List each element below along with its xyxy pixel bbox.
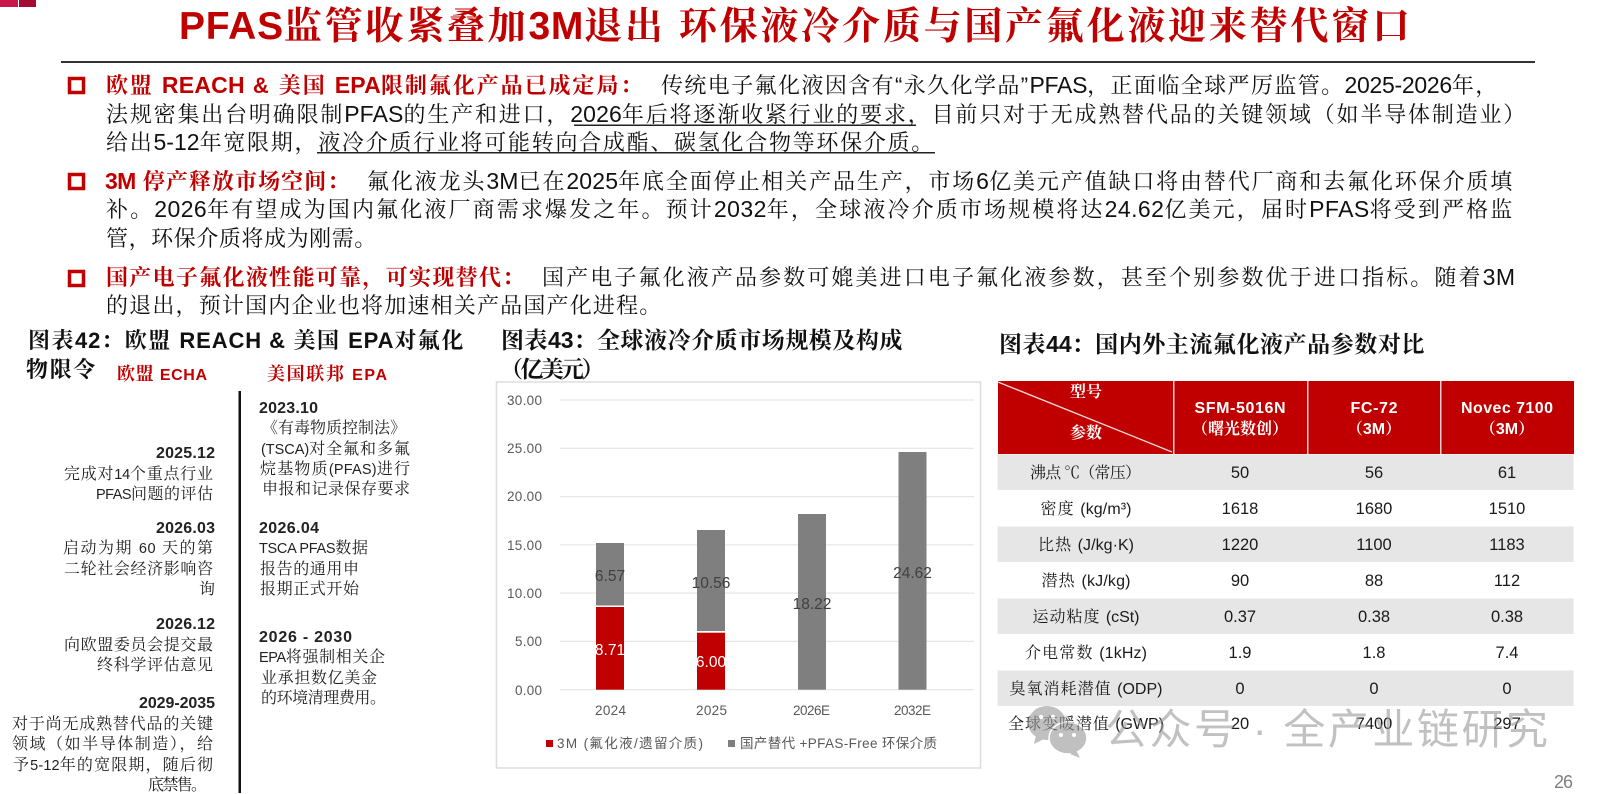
row: density	[1040, 500, 1525, 518]
EU events: 询	[199, 580, 216, 598]
table header: （3M）	[1480, 420, 1534, 438]
row: specific heat: 1100	[1356, 536, 1392, 554]
row: boiling point: 50	[1231, 464, 1249, 482]
row: specific heat	[1038, 536, 1525, 554]
bar: 2032E: 24.62	[893, 565, 932, 582]
point 2: 3M exit: 管，环保介质将成为刚需。	[106, 226, 378, 252]
EU events: 终科学评估意见	[97, 656, 214, 674]
row: dielectric constant	[1025, 644, 1518, 662]
EU events: 2029-2035	[139, 695, 215, 712]
row: ODP: 0	[1502, 680, 1512, 698]
US events: 报期正式开始	[260, 579, 360, 598]
point 3: domestic substitution: 国产电子氟化液性能可靠，可实现替代：	[106, 265, 526, 291]
panel: figure 44 table	[998, 331, 1574, 733]
y axis labels: 0.00	[515, 683, 542, 698]
bar: 2025	[692, 530, 730, 690]
table header: FC-72	[1350, 400, 1398, 417]
EU events: 对于尚无成熟替代品的关键	[12, 715, 214, 733]
row: latent heat: 112	[1494, 572, 1520, 590]
point 2: 3M exit: 3M 停产释放市场空间：	[105, 168, 351, 194]
row: specific heat: 1220	[1222, 536, 1258, 554]
row: density: 1510	[1489, 500, 1525, 518]
bar: 2025: 10.56	[692, 575, 730, 592]
row: latent heat: 88	[1365, 572, 1383, 590]
US events: 申报和记录保存要求	[262, 479, 411, 498]
x axis labels: 2025	[696, 703, 727, 718]
panel: figure 42 timeline	[12, 328, 464, 794]
row: viscosity	[1032, 608, 1523, 626]
row: dielectric constant: 1.8	[1363, 644, 1385, 662]
timeline axis	[238, 391, 241, 793]
row: density: 1618	[1222, 500, 1258, 518]
column label: EU ECHA: 欧盟 ECHA	[117, 364, 207, 384]
row: latent heat	[1042, 572, 1520, 590]
point 2: 3M exit	[70, 168, 1514, 252]
bar: 2024: 6.57	[595, 568, 625, 585]
row: viscosity: 0.38	[1358, 608, 1390, 626]
row: dielectric constant: 介电常数 (1kHz)	[1025, 644, 1147, 662]
row: ODP: 臭氧消耗潜值 (ODP)	[1010, 680, 1162, 698]
US events: TSCA PFAS数据	[259, 539, 369, 557]
EU events: 向欧盟委员会提交最	[64, 635, 214, 654]
table header	[998, 381, 1574, 454]
row: dielectric constant: 7.4	[1496, 644, 1518, 662]
x axis labels: 2032E	[894, 703, 931, 718]
row shading	[998, 454, 1574, 706]
y axis labels: 5.00	[515, 634, 542, 649]
row: boiling point: 56	[1365, 464, 1383, 482]
point 1: EU and US regulation: 传统电子氟化液因含有“永久化学品”PFAS，正面临全球严厉监管。2025-2026年，	[661, 72, 1499, 99]
panel: figure 43 chart	[496, 327, 980, 768]
heading: figure 43: （亿美元）	[500, 356, 605, 382]
point 1: EU and US regulation: 给出5-12年宽限期，液冷介质行业将可能转向合成酯、碳氢化合物等环保介质。	[106, 129, 935, 156]
EU events: 完成对14个重点行业	[64, 465, 214, 483]
EU events: PFAS问题的评估	[96, 485, 214, 503]
row: GWP	[1008, 715, 1521, 733]
row: viscosity: 0.38	[1491, 608, 1523, 626]
US events: 2023.10	[259, 400, 318, 417]
bar: 2024	[595, 543, 625, 690]
row: GWP: 20	[1231, 715, 1249, 733]
EU events: 领域（如半导体制造），给	[12, 735, 214, 753]
US events: 的环境清理费用。	[261, 689, 387, 707]
watermark: 公众号 · 全产业链研究	[1105, 706, 1548, 753]
EU events: 二轮社会经济影响咨	[64, 560, 214, 578]
heading: figure 42	[26, 328, 464, 382]
EU events: 予5-12年的宽限期，随后彻	[13, 755, 214, 774]
y axis labels: 20.00	[507, 489, 542, 504]
y axis labels	[507, 393, 542, 698]
icon: chat bubbles	[1028, 706, 1087, 758]
row: viscosity: 运动粘度 (cSt)	[1032, 608, 1140, 626]
table header: SFM-5016N	[1194, 400, 1286, 417]
x axis labels: 2024	[595, 703, 626, 718]
row: specific heat: 1183	[1489, 536, 1525, 554]
bar: 2026E: 18.22	[793, 596, 831, 613]
US events: 2026 - 2030	[259, 629, 352, 646]
US events: 报告的通用申	[260, 559, 360, 578]
title: PFAS监管收紧叠加3M退出 环保液冷介质与国产氟化液迎来替代窗口	[179, 5, 1412, 48]
row: GWP: 全球变暖潜值 (GWP)	[1008, 715, 1164, 733]
heading: figure 43	[500, 327, 903, 382]
legend	[546, 736, 937, 751]
table header: 型号	[1070, 383, 1102, 401]
US events: 烷基物质(PFAS)进行	[260, 460, 411, 478]
legend: 国产替代 +PFAS-Free 环保介质	[740, 736, 937, 751]
panel: key points	[70, 72, 1527, 319]
y axis labels: 15.00	[507, 538, 542, 553]
row: ODP: 0	[1235, 680, 1245, 698]
row: dielectric constant: 1.9	[1229, 644, 1251, 662]
US events: 《有毒物质控制法》	[262, 419, 407, 437]
bar: 2024: 8.71	[595, 642, 625, 659]
row: latent heat: 90	[1231, 572, 1249, 590]
parameter table	[998, 381, 1574, 733]
US events: 业承担数亿美金	[261, 669, 378, 687]
point 1: EU and US regulation: 法规密集出台明确限制PFAS的生产和进口，2026年后将逐渐收紧行业的要求，目前只对于无成熟替代品的关键领域（如半导体制造业）	[106, 101, 1527, 128]
EU events	[12, 445, 216, 794]
EU events: 2026.12	[156, 616, 215, 633]
row: density: 1680	[1356, 500, 1392, 518]
bar: 2032E	[893, 452, 932, 690]
row: ODP: 0	[1369, 680, 1379, 698]
table header: 参数	[1070, 423, 1102, 442]
heading: figure 44: 图表44：国内外主流氟化液产品参数对比	[999, 331, 1425, 357]
US events: EPA将强制相关企	[259, 648, 386, 666]
point 1: EU and US regulation: 欧盟 REACH & 美国 EPA限制氟化产品已成定局：	[106, 72, 644, 98]
EU events: 启动为期 60 天的第	[63, 539, 214, 557]
x axis labels	[595, 703, 931, 718]
table header: （曙光数创）	[1192, 419, 1288, 438]
corner decoration	[0, 0, 36, 7]
row: density: 密度 (kg/m³)	[1040, 500, 1132, 518]
row: boiling point: 61	[1498, 464, 1516, 482]
row: specific heat: 比热 (J/kg·K)	[1038, 536, 1134, 554]
row: GWP: 297	[1493, 715, 1521, 733]
EU events: 底禁售。	[148, 776, 208, 794]
US events: (TSCA)对全氟和多氟	[261, 440, 411, 458]
table header: （3M）	[1347, 420, 1401, 438]
row: boiling point	[1030, 464, 1516, 482]
stacked bar chart	[496, 382, 980, 768]
y axis labels: 30.00	[507, 393, 542, 408]
row: GWP: 7400	[1356, 715, 1392, 733]
point 1: EU and US regulation	[70, 72, 1527, 156]
bar: 2025: 6.00	[696, 654, 726, 671]
heading: figure 43: 图表43：全球液冷介质市场规模及构成	[501, 327, 903, 353]
y axis labels: 10.00	[507, 586, 542, 601]
row: boiling point: 沸点 ℃（常压）	[1030, 464, 1142, 482]
row: viscosity: 0.37	[1224, 608, 1256, 626]
column label: US EPA: 美国联邦 EPA	[267, 363, 387, 384]
y axis labels: 25.00	[507, 441, 542, 456]
row: ODP	[1010, 680, 1512, 698]
point 3: domestic substitution: 国产电子氟化液产品参数可媲美进口电子氟化液参数，甚至个别参数优于进口指标。随着3M	[542, 264, 1515, 291]
point 3: domestic substitution: 的退出，预计国内企业也将加速相关产品国产化进程。	[106, 293, 663, 319]
heading: figure 42: 物限令	[26, 357, 96, 382]
bar: 2026E	[793, 514, 831, 690]
point 2: 3M exit: 补。2026年有望成为国内氟化液厂商需求爆发之年。预计2032年，全球液冷介质市场规模将达24.62亿美元，届时PFAS将受到严格监	[106, 196, 1514, 223]
EU events: 2026.03	[156, 520, 215, 537]
US events	[259, 400, 411, 707]
point 3: domestic substitution	[70, 264, 1515, 319]
point 2: 3M exit: 氟化液龙头3M已在2025年底全面停止相关产品生产，市场6亿美元产值缺口将由替代厂商和去氟化环保介质填	[367, 168, 1514, 195]
US events: 2026.04	[259, 520, 319, 537]
legend: 3M (氟化液/遗留介质)	[557, 736, 703, 751]
heading: figure 42: 图表42：欧盟 REACH & 美国 EPA对氟化	[28, 328, 464, 353]
x axis labels: 2026E	[793, 703, 830, 718]
EU events: 2025.12	[156, 445, 215, 462]
row: latent heat: 潜热 (kJ/kg)	[1042, 572, 1130, 590]
table header: Novec 7100	[1461, 400, 1553, 417]
page number: 26	[1554, 772, 1573, 792]
